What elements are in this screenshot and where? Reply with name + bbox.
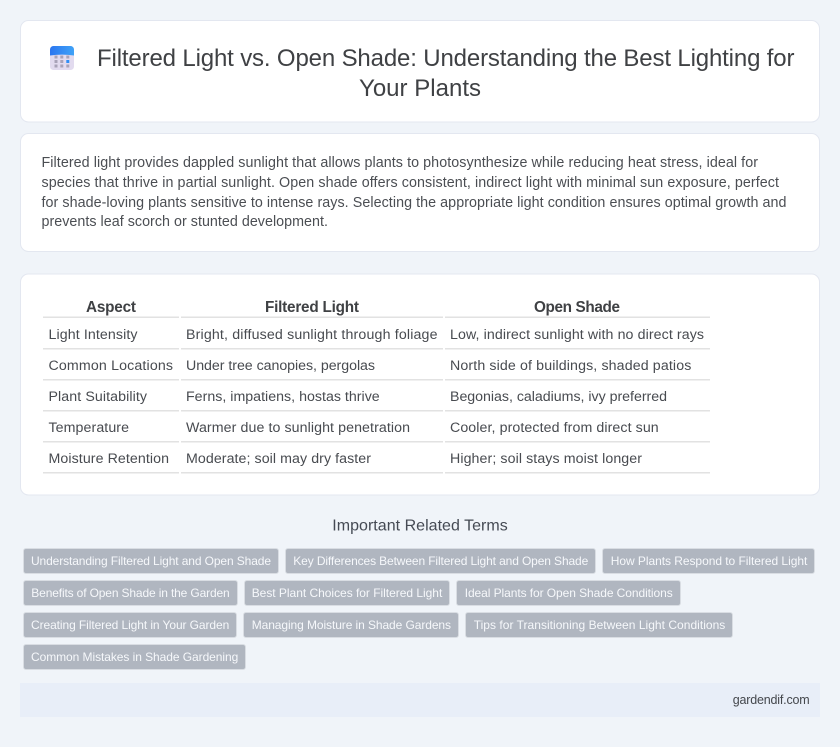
tag [286, 548, 596, 574]
title: Your Plants [359, 75, 481, 102]
tag [244, 612, 458, 638]
tag [244, 580, 450, 606]
table row: temperature [43, 420, 710, 442]
tag: Benefits of Open Shade in the Garden [31, 586, 230, 600]
tag: How Plants Respond to Filtered Light [611, 554, 808, 568]
table row: light intensity: Low, indirect sunlight with no direct rays [450, 327, 704, 343]
tag [24, 548, 278, 574]
title [97, 45, 794, 102]
footer source text: gardendif.com [733, 693, 810, 707]
text block: intro: for shade-loving plants sensitive to intense rays. Selecting the appropriate light condition ensures optimal growth and [42, 195, 787, 211]
tag [24, 644, 246, 670]
table row: common locations [43, 358, 710, 380]
tag: Tips for Transitioning Between Light Conditions [474, 618, 725, 632]
tag [602, 548, 814, 574]
table row: light intensity: Bright, diffused sunlight through foliage [186, 327, 438, 343]
tag: Best Plant Choices for Filtered Light [252, 586, 443, 600]
table row: plant suitability: Plant Suitability [48, 389, 148, 405]
footer [20, 683, 820, 717]
table row: common locations: Under tree canopies, pergolas [186, 358, 375, 374]
table row: light intensity: Light Intensity [48, 327, 138, 343]
tag: Creating Filtered Light in Your Garden [31, 618, 229, 632]
text block: intro: species that thrive in partial sunlight. Open shade offers consistent, indirect light with minimal sun exposure, perfect [42, 175, 779, 191]
tag: Common Mistakes in Shade Gardening [31, 650, 238, 664]
text block: intro: prevents leaf scorch or stunted development. [42, 214, 328, 230]
table row: temperature: Warmer due to sunlight penetration [186, 420, 410, 436]
table header row: Open Shade [534, 299, 620, 316]
tag [456, 580, 680, 606]
tag [24, 612, 236, 638]
table row: moisture retention [43, 451, 710, 474]
table header row: Filtered Light [265, 299, 359, 316]
table row: plant suitability: Begonias, caladiums, ivy preferred [450, 389, 667, 405]
panel: intro paragraph [20, 134, 820, 252]
table row: common locations: North side of buildings, shaded patios [450, 358, 691, 374]
panel: header [20, 20, 820, 122]
tag: Key Differences Between Filtered Light and Open Shade [293, 554, 589, 568]
tag: Ideal Plants for Open Shade Conditions [465, 586, 673, 600]
table row: moisture retention: Higher; soil stays moist longer [450, 451, 642, 467]
table header row [43, 299, 710, 318]
table row: plant suitability [43, 389, 710, 412]
title: Filtered Light vs. Open Shade: Understanding the Best Lighting for [97, 45, 794, 72]
tag list: related terms [24, 548, 814, 670]
text block: intro [42, 155, 787, 230]
table row: moisture retention: Moisture Retention [48, 451, 169, 467]
icon: calendar [50, 46, 74, 70]
table row: moisture retention: Moderate; soil may dry faster [186, 451, 371, 467]
text block: intro: Filtered light provides dappled sunlight that allows plants to photosynthesize while reducing heat stress, ideal for [42, 155, 758, 171]
table row: temperature: Cooler, protected from direct sun [450, 420, 659, 436]
heading: related terms: Important Related Terms [332, 518, 508, 534]
tag [466, 612, 732, 638]
table row: light intensity [43, 327, 710, 350]
tag [24, 580, 238, 606]
tag: Understanding Filtered Light and Open Shade [31, 554, 271, 568]
tag: Managing Moisture in Shade Gardens [252, 618, 451, 632]
panel: comparison table [20, 274, 820, 495]
table row: temperature: Temperature [48, 420, 129, 436]
table header row: Aspect [86, 299, 136, 316]
table row: plant suitability: Ferns, impatiens, hostas thrive [186, 389, 380, 405]
table row: common locations: Common Locations [48, 358, 173, 374]
